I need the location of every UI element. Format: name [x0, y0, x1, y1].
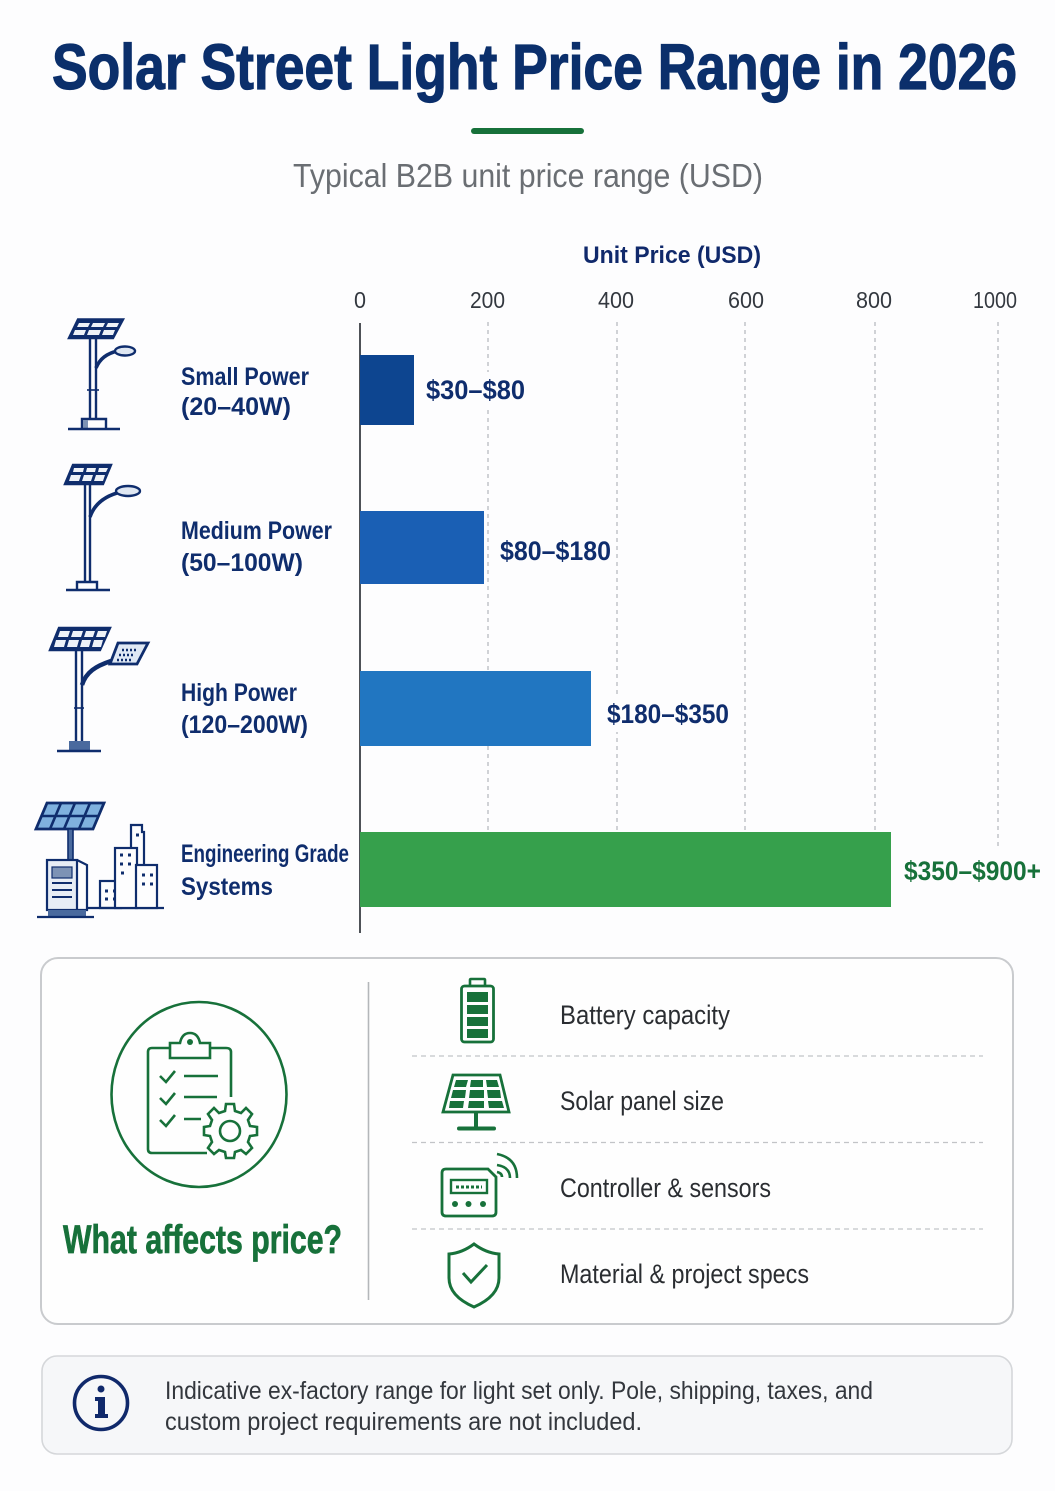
axis title: Unit Price (USD) — [583, 242, 761, 269]
axis tick labels: 0 — [354, 287, 366, 313]
bar: small power — [360, 355, 414, 425]
factor: controller and sensors: Controller & sensors — [560, 1173, 771, 1203]
icon: info — [74, 1376, 128, 1430]
icon: medium power solar light — [65, 465, 140, 590]
value: high power: $180–$350 — [607, 699, 729, 729]
factor: solar panel size: Solar panel size — [560, 1086, 724, 1116]
icon: shield with check — [449, 1244, 499, 1307]
icon: controller with signal — [442, 1154, 517, 1216]
icon: solar panel — [443, 1075, 509, 1130]
axis tick labels: 600 — [728, 287, 764, 313]
bar: high power — [360, 671, 591, 746]
factor: battery capacity: Battery capacity — [560, 1000, 730, 1030]
label: high power: High Power — [181, 679, 297, 707]
panel heading: What affects price? — [63, 1218, 342, 1262]
icon: small power solar light — [68, 320, 135, 429]
label: medium power: (50–100W) — [181, 549, 303, 577]
label: engineering grade: Systems — [181, 873, 273, 901]
icon: high power solar light — [50, 628, 148, 751]
label: engineering grade: Engineering Grade — [181, 840, 349, 868]
axis tick labels — [354, 287, 1017, 313]
icon: clipboard with gear — [112, 1002, 286, 1187]
label: high power — [181, 679, 308, 739]
label: medium power: Medium Power — [181, 517, 332, 545]
icon: engineering grade system — [36, 803, 164, 917]
subtitle: Typical B2B unit price range (USD) — [293, 157, 763, 194]
label: small power: (20–40W) — [181, 393, 291, 421]
title underline — [471, 128, 584, 134]
value: engineering grade: $350–$900+ — [904, 856, 1041, 886]
label: medium power — [181, 517, 332, 577]
icon: battery — [462, 979, 494, 1042]
factor: material and project specs: Material & project specs — [560, 1259, 809, 1289]
bar: medium power — [360, 511, 484, 584]
panel: note — [42, 1356, 1012, 1454]
axis tick labels: 800 — [856, 287, 892, 313]
value: small power: $30–$80 — [426, 375, 525, 405]
label: engineering grade — [181, 840, 349, 901]
panel: what affects price — [41, 958, 1013, 1324]
axis tick labels: 200 — [470, 287, 505, 313]
bar: engineering grade — [360, 832, 891, 907]
note text — [165, 1377, 873, 1436]
bar chart — [354, 242, 1041, 933]
note text: Indicative ex-factory range for light set only. Pole, shipping, taxes, and — [165, 1377, 873, 1405]
axis tick labels: 1000 — [973, 287, 1017, 313]
value: medium power: $80–$180 — [500, 536, 611, 566]
note text: custom project requirements are not included. — [165, 1408, 642, 1436]
label: small power — [181, 363, 309, 421]
label: high power: (120–200W) — [181, 711, 308, 739]
label: small power: Small Power — [181, 363, 309, 391]
axis tick labels: 400 — [598, 287, 634, 313]
